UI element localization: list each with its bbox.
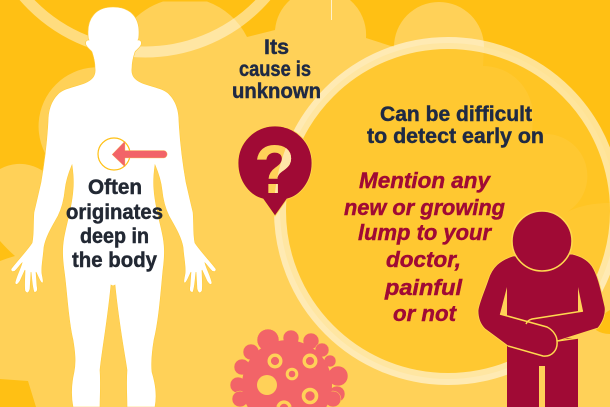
text: mention any new or growing lump: Mention any [359, 168, 492, 193]
icon: human body silhouette [11, 7, 216, 407]
text: often originates deep in the body: Often [88, 176, 142, 199]
text: its cause is unknown: unknown [232, 80, 321, 103]
icon: question mark speech bubble: ? [254, 131, 295, 208]
text: its cause is unknown: cause is [239, 58, 311, 81]
text: its cause is unknown: Its [264, 36, 289, 59]
arrow pointing to abdomen [112, 141, 167, 167]
text: often originates deep in the body [66, 176, 163, 272]
text: mention any new or growing lump [344, 168, 506, 326]
top arc ring [0, 0, 305, 52]
text: often originates deep in the body: deep in [80, 225, 149, 248]
text: can be difficult to detect early on: Can be difficult [380, 103, 532, 126]
big circle fill [280, 43, 610, 379]
icon: person holding stomach [478, 211, 605, 407]
big circle ring [280, 43, 610, 379]
target circle on abdomen [98, 138, 130, 170]
text: its cause is unknown [232, 36, 321, 103]
icon: question mark speech bubble [238, 126, 312, 217]
text: can be difficult to detect early on [367, 103, 544, 148]
text: often originates deep in the body: the body [72, 249, 157, 272]
icon: cancer cell [230, 329, 348, 407]
text: often originates deep in the body: originates [66, 201, 163, 224]
text: mention any new or growing lump: lump to your [358, 220, 492, 245]
text: mention any new or growing lump: doctor, [386, 247, 461, 272]
text: mention any new or growing lump: new or growing [344, 195, 506, 220]
text: mention any new or growing lump: painful [384, 275, 463, 300]
text: mention any new or growing lump: or not [393, 301, 458, 326]
thin line [331, 0, 332, 20]
text: can be difficult to detect early on: to detect early on [367, 125, 544, 148]
